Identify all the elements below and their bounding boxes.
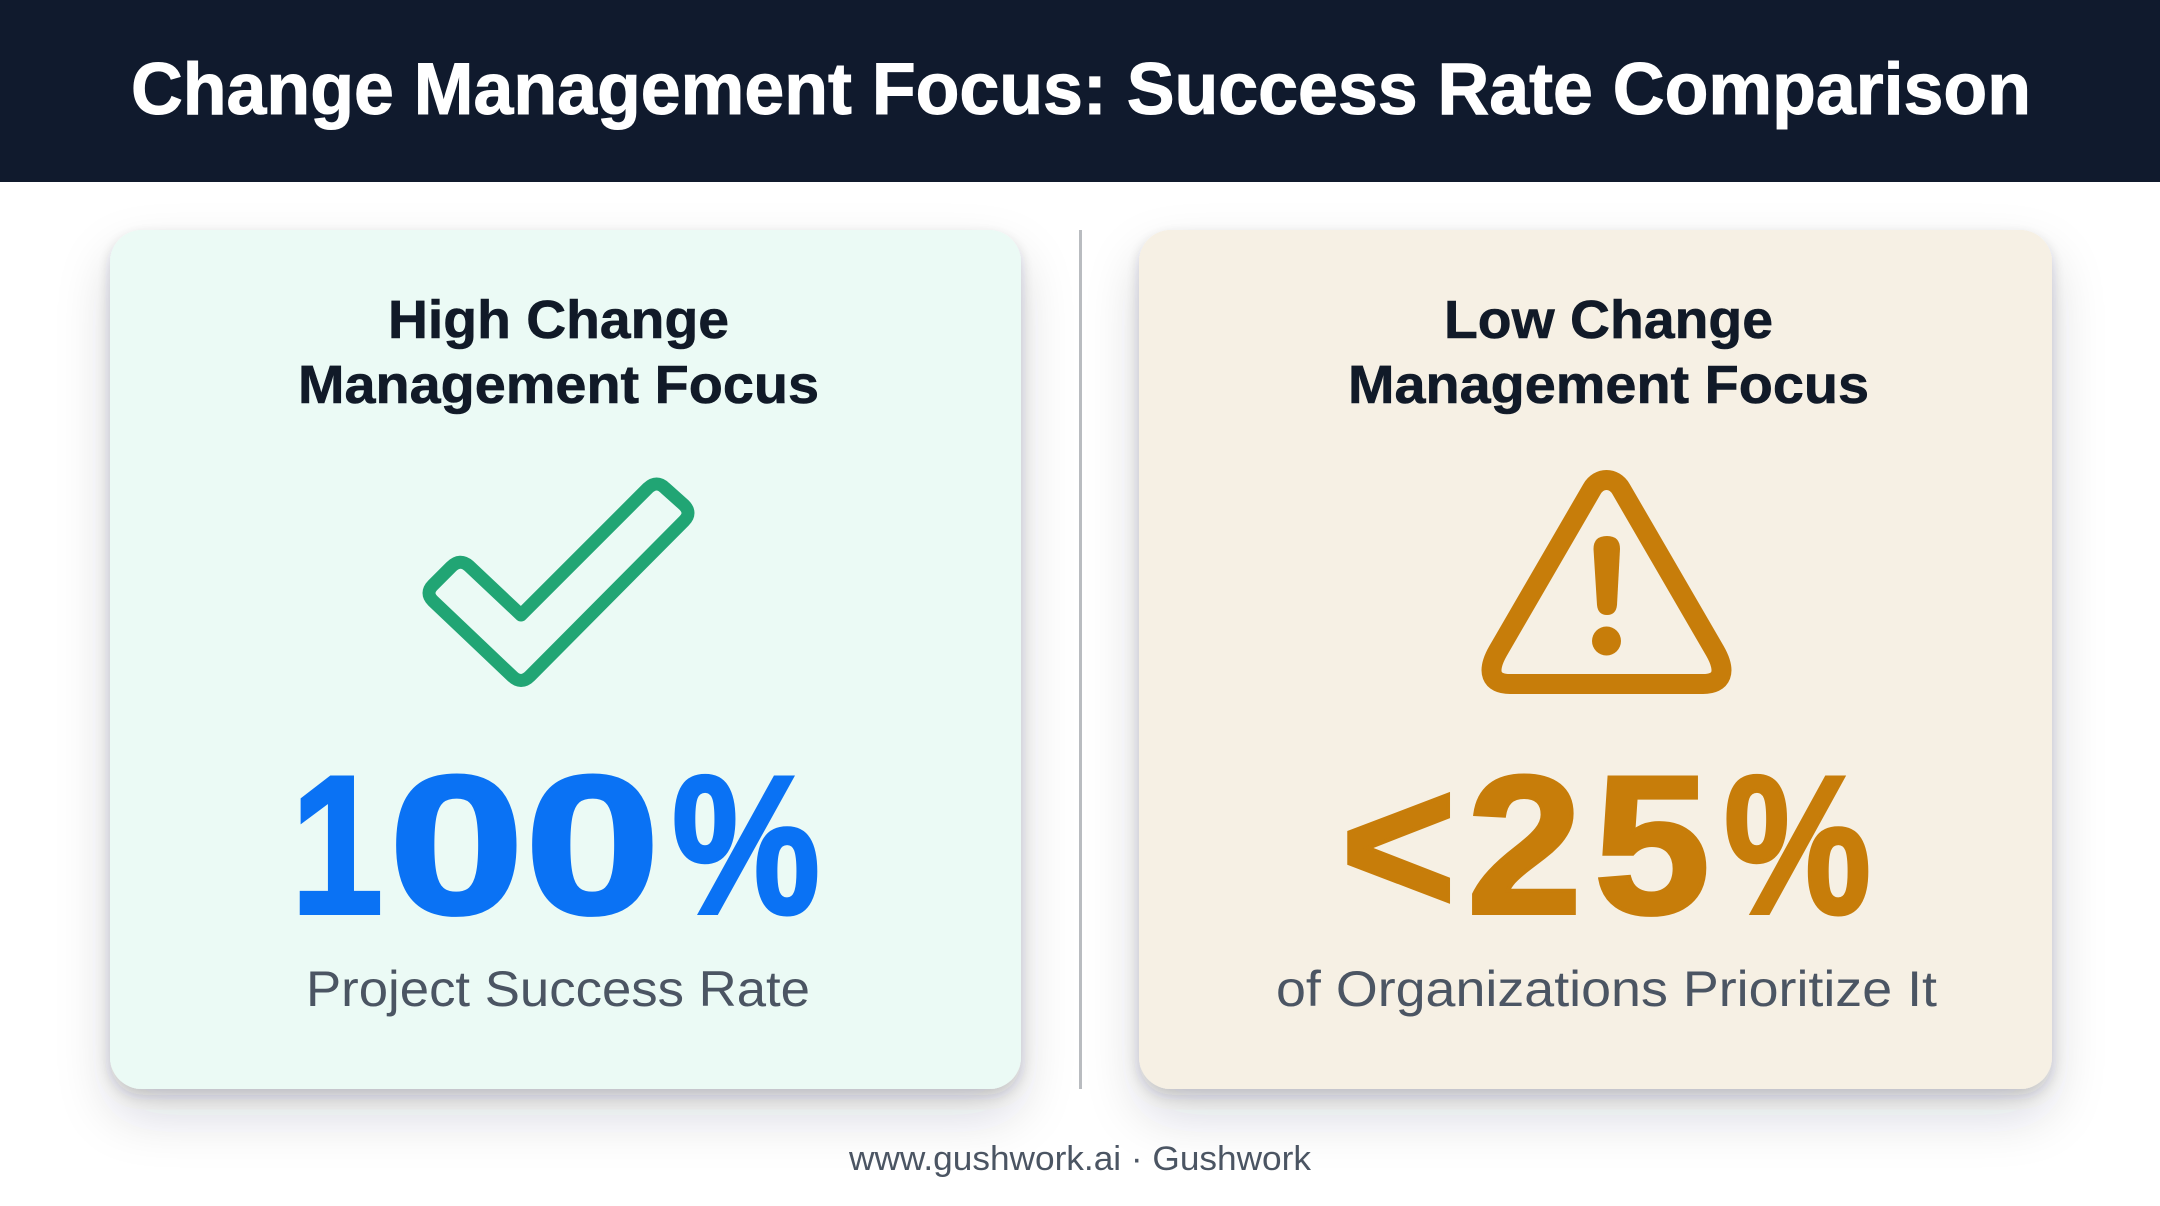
heading: low change management focus — [1348, 290, 1869, 415]
stat: 100%: % — [672, 735, 820, 955]
stat: <25%: 5 — [1594, 735, 1710, 955]
icon: check mark — [429, 484, 688, 680]
icon: warning triangle — [1492, 480, 1721, 684]
stat: <25%: 2 — [1467, 735, 1582, 955]
stat: 100%: 0 — [389, 735, 524, 955]
footer source: www.gushwork.ai · Gushwork — [848, 1140, 1312, 1178]
card background: high focus — [110, 230, 1021, 1089]
panel: low change management focus — [1139, 230, 2052, 1089]
divider — [1079, 230, 1082, 1089]
card background: low focus — [1139, 230, 2052, 1089]
heading: high change management focus: Management Focus — [298, 355, 819, 415]
heading: high change management focus — [298, 290, 819, 415]
heading: low change management focus: Low Change — [1444, 290, 1773, 350]
stat: 100%: 1 — [291, 735, 383, 955]
stat: 100%: 0 — [525, 735, 660, 955]
header banner — [0, 0, 2160, 182]
title: Change Management Focus: Success Rate Comparison — [131, 49, 2031, 130]
caption: project success rate: Project Success Rate — [306, 961, 810, 1017]
heading: low change management focus: Management Focus — [1348, 355, 1869, 415]
stat: <25%: % — [1724, 735, 1871, 955]
caption: of organizations prioritize it: of Organizations Prioritize It — [1276, 961, 1937, 1017]
heading: high change management focus: High Change — [388, 290, 729, 350]
panel: high change management focus — [110, 230, 1021, 1089]
stat: <25%: < — [1341, 735, 1456, 955]
